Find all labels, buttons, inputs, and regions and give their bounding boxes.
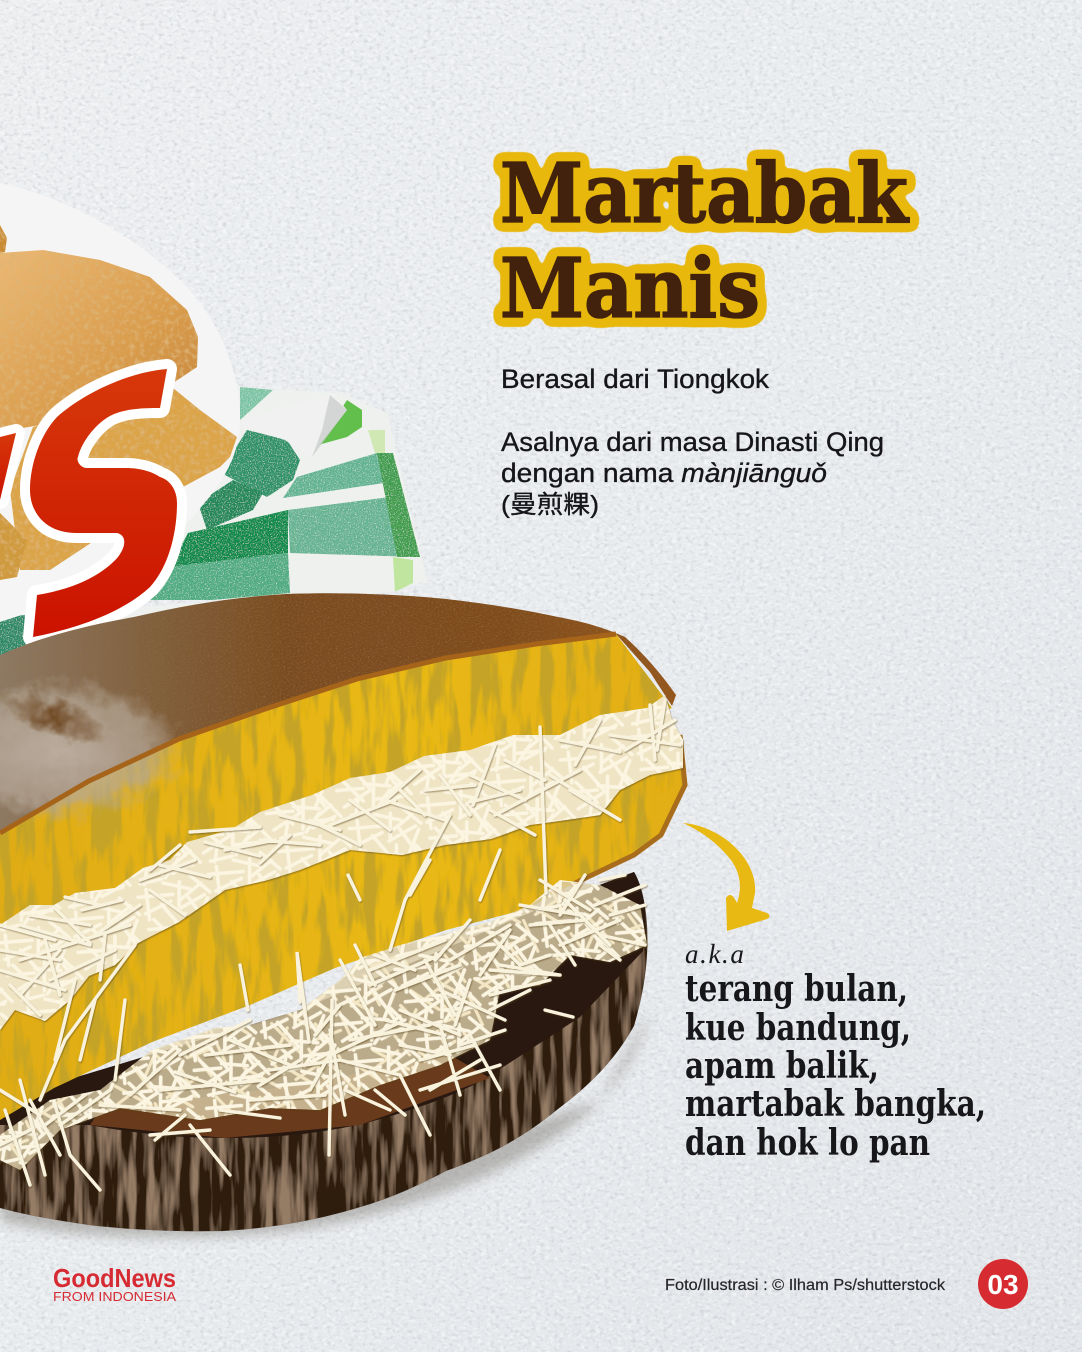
a.k.a other names: a.k.a xyxy=(685,939,745,969)
a.k.a other names: dan hok lo pan xyxy=(685,1122,930,1164)
title: Martabak Manis xyxy=(500,146,910,337)
lower yellow cake layer xyxy=(0,735,685,1120)
title: Martabak Manis: Martabak xyxy=(500,146,910,242)
a.k.a other names: kue bandung, xyxy=(685,1007,911,1049)
arrow pointing to a.k.a names xyxy=(683,823,770,931)
photo: fried food on plate xyxy=(0,225,237,580)
intro text: (曼煎粿) xyxy=(501,491,599,519)
cake right rim xyxy=(571,735,685,885)
a.k.a other names: terang bulan, xyxy=(685,968,908,1010)
logo: GoodNews from Indonesia: GoodNews xyxy=(53,1263,176,1293)
browned crust top xyxy=(0,593,676,833)
dark patch on crust xyxy=(0,679,118,755)
photo: checked green cloth xyxy=(0,380,440,660)
crust orange edge xyxy=(0,634,616,833)
intro text: dengan nama mànjiānguǒ xyxy=(501,458,827,488)
flour dust on crust xyxy=(0,678,185,822)
cheese shreds xyxy=(0,700,680,1190)
board top surface xyxy=(0,872,646,1138)
big red letter S with white outline xyxy=(0,369,177,637)
board shadow xyxy=(0,1010,650,1238)
wooden board xyxy=(0,872,647,1231)
upper yellow cake layer xyxy=(0,634,672,935)
a.k.a other names: apam balik, xyxy=(685,1045,879,1087)
a.k.a other names: martabak bangka, xyxy=(685,1083,986,1125)
cheese mass, lower layer xyxy=(0,880,647,1170)
photo: martabak manis on wooden board xyxy=(0,593,685,1238)
rust patch on board top xyxy=(90,1055,490,1138)
cheese mass, middle layer xyxy=(0,695,683,1030)
page number badge: 03 xyxy=(987,1269,1019,1300)
title: Martabak Manis: Manis xyxy=(500,241,760,337)
intro text: Asalnya dari masa Dinasti Qing xyxy=(501,427,884,457)
page number badge xyxy=(978,1259,1028,1309)
photo: white plate xyxy=(0,183,240,622)
photo credit: Foto/Ilustrasi : © Ilham Ps/shutterstock xyxy=(665,1277,945,1294)
a.k.a other names xyxy=(685,939,986,1164)
logo: GoodNews from Indonesia xyxy=(53,1263,176,1304)
intro text: Berasal dari Tiongkok xyxy=(501,364,770,394)
logo: GoodNews from Indonesia: FROM INDONESIA xyxy=(53,1289,176,1304)
intro text xyxy=(501,364,884,519)
